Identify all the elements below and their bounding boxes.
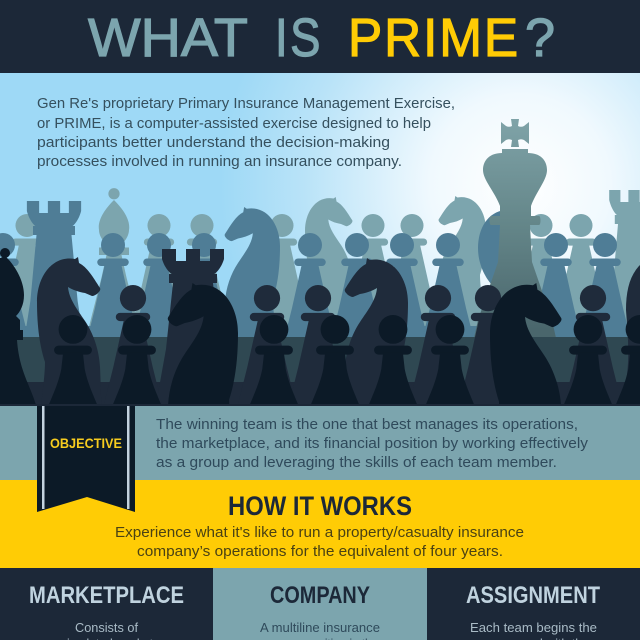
panel: objective [0, 404, 640, 480]
description: company’s operations for the equivalent of four years. [137, 544, 503, 560]
panel: chess hero [0, 73, 640, 503]
marketplace heading: MARKETPLACE [29, 582, 184, 609]
intro text: processes involved in running an insurance company. [37, 154, 402, 170]
title: WHAT [88, 8, 248, 68]
ribbon label: OBJECTIVE [50, 435, 122, 451]
company heading: COMPANY [270, 582, 370, 609]
panel: assignment [427, 568, 640, 640]
description [115, 525, 524, 560]
description: Experience what it's like to run a property/casualty insurance [115, 525, 524, 541]
header band [0, 0, 640, 73]
board floor [0, 337, 640, 406]
king [474, 119, 556, 338]
intro text [37, 96, 455, 170]
marketplace text: Consists of [75, 621, 139, 635]
company text: A multiline insurance [260, 621, 380, 635]
intro text: or PRIME, is a computer-assisted exercise designed to help [37, 116, 431, 132]
title: PRIME [348, 8, 520, 68]
title: ? [525, 8, 555, 68]
panel: marketplace [0, 568, 213, 640]
title: IS [275, 8, 323, 68]
panel: how it works [0, 480, 640, 568]
second row of chess pieces [37, 249, 640, 453]
middle row of chess pieces [0, 201, 640, 378]
intro text: Gen Re's proprietary Primary Insurance Management Exercise, [37, 96, 455, 112]
heading: HOW IT WORKS [228, 491, 412, 521]
objective text [156, 417, 589, 471]
panel: company [213, 568, 427, 640]
objective text: as a group and leveraging the skills of each team member. [156, 455, 557, 471]
assignment heading: ASSIGNMENT [466, 582, 600, 609]
assignment text: Each team begins the [470, 621, 597, 635]
objective text: the marketplace, and its financial position by working effectively [156, 436, 589, 452]
title [88, 8, 555, 68]
objective ribbon [37, 406, 135, 512]
intro text: participants better understand the decision-making [37, 135, 390, 151]
front row of chess pieces [0, 248, 640, 503]
marketplace text [61, 621, 153, 640]
objective text: The winning team is the one that best manages its operations, [156, 417, 578, 433]
back row of chess pieces [0, 188, 640, 346]
